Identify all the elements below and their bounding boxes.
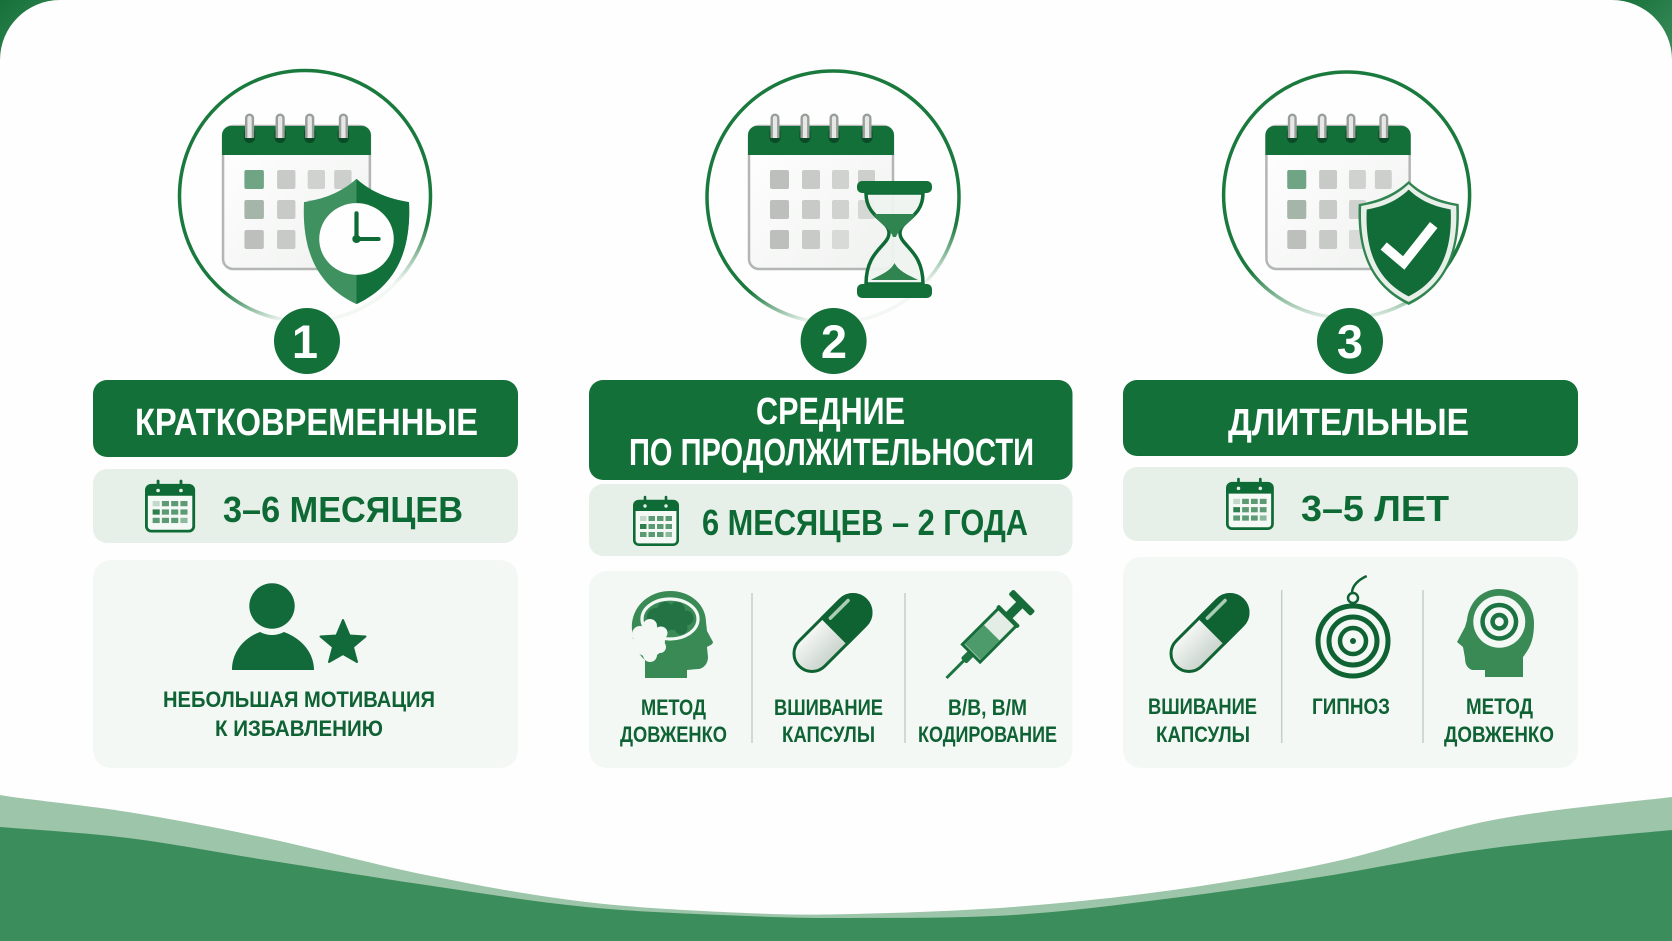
number badge 2: 2 bbox=[821, 315, 847, 368]
panel: medium-term methods bbox=[589, 571, 1072, 768]
number badge 1 bbox=[274, 308, 340, 374]
label: Dovzhenko method bbox=[1444, 694, 1554, 747]
label: motivation: НЕБОЛЬШАЯ МОТИВАЦИЯ bbox=[163, 687, 435, 712]
duration bar 1 bbox=[93, 469, 518, 543]
icon: shield with check mark bbox=[1358, 181, 1459, 305]
icon: calendar 2 bbox=[748, 115, 894, 269]
icon: person with star bbox=[232, 583, 366, 670]
label: capsule implant: ВШИВАНИЕ bbox=[774, 695, 883, 720]
heading: long-term: ДЛИТЕЛЬНЫЕ bbox=[1228, 402, 1469, 444]
icon: shield with clock bbox=[304, 179, 409, 304]
top-left corner accent bbox=[0, 0, 60, 60]
label: Dovzhenko method: ДОВЖЕНКО bbox=[1444, 722, 1554, 747]
ring around illustration 1 bbox=[180, 70, 430, 322]
bottom wave: dark layer bbox=[0, 827, 1672, 941]
duration bar 3: 3–5 ЛЕТ bbox=[1301, 488, 1449, 529]
label: IV/IM coding: КОДИРОВАНИЕ bbox=[918, 722, 1057, 747]
label: hypnosis: ГИПНОЗ bbox=[1312, 694, 1390, 719]
bottom wave: light layer bbox=[0, 795, 1672, 941]
icon: capsule bbox=[785, 585, 881, 680]
ring around illustration 3 bbox=[1224, 72, 1470, 318]
label: capsule implant bbox=[1148, 694, 1257, 747]
label: capsule implant: КАПСУЛЫ bbox=[1156, 722, 1250, 747]
panel: long-term methods bbox=[1123, 557, 1578, 768]
duration bar 2: 6 МЕСЯЦЕВ – 2 ГОДА bbox=[702, 502, 1028, 543]
top-right corner accent bbox=[1612, 0, 1672, 60]
label: Dovzhenko method: ДОВЖЕНКО bbox=[620, 722, 727, 747]
heading: medium-term: СРЕДНИЕ bbox=[756, 391, 905, 433]
duration bar 2 bbox=[589, 484, 1072, 556]
panel: motivation bbox=[93, 560, 518, 768]
label: IV/IM coding: В/В, В/М bbox=[948, 695, 1027, 720]
column 3: long-term bbox=[1123, 72, 1578, 768]
label: Dovzhenko method: МЕТОД bbox=[641, 695, 706, 720]
number badge 2 bbox=[801, 308, 867, 374]
label: IV/IM coding bbox=[918, 695, 1057, 747]
icon: capsule bbox=[1162, 585, 1258, 680]
duration bar 3 bbox=[1123, 467, 1578, 541]
icon: calendar 1 bbox=[222, 115, 371, 269]
icon: calendar 3 bbox=[1265, 115, 1411, 269]
label: motivation: К ИЗБАВЛЕНИЮ bbox=[215, 716, 383, 741]
heading: medium-term: ПО ПРОДОЛЖИТЕЛЬНОСТИ bbox=[629, 432, 1034, 474]
label: Dovzhenko method bbox=[620, 695, 727, 747]
ring around illustration 2 bbox=[707, 71, 959, 323]
label: capsule implant bbox=[774, 695, 883, 747]
number badge 3 bbox=[1317, 308, 1383, 374]
heading: medium-term bbox=[589, 380, 1072, 480]
icon: hourglass bbox=[857, 181, 932, 298]
duration bar 1: 3–6 МЕСЯЦЕВ bbox=[223, 489, 463, 530]
number badge 3: 3 bbox=[1337, 315, 1363, 368]
heading: short-term: КРАТКОВРЕМЕННЫЕ bbox=[135, 402, 478, 444]
number badge 1: 1 bbox=[292, 315, 318, 368]
icon: head with brain bbox=[630, 591, 713, 678]
icon: head with target bbox=[1457, 589, 1534, 677]
icon: syringe bbox=[936, 589, 1035, 689]
label: capsule implant: КАПСУЛЫ bbox=[782, 722, 875, 747]
heading: long-term bbox=[1123, 380, 1578, 456]
label: capsule implant: ВШИВАНИЕ bbox=[1148, 694, 1257, 719]
column 1: short-term bbox=[93, 70, 518, 768]
heading: short-term bbox=[93, 380, 518, 457]
label: motivation bbox=[163, 687, 435, 741]
icon: hypnosis pendant bbox=[1318, 576, 1388, 676]
label: Dovzhenko method: МЕТОД bbox=[1466, 694, 1533, 719]
column 2: medium-term bbox=[589, 71, 1072, 768]
